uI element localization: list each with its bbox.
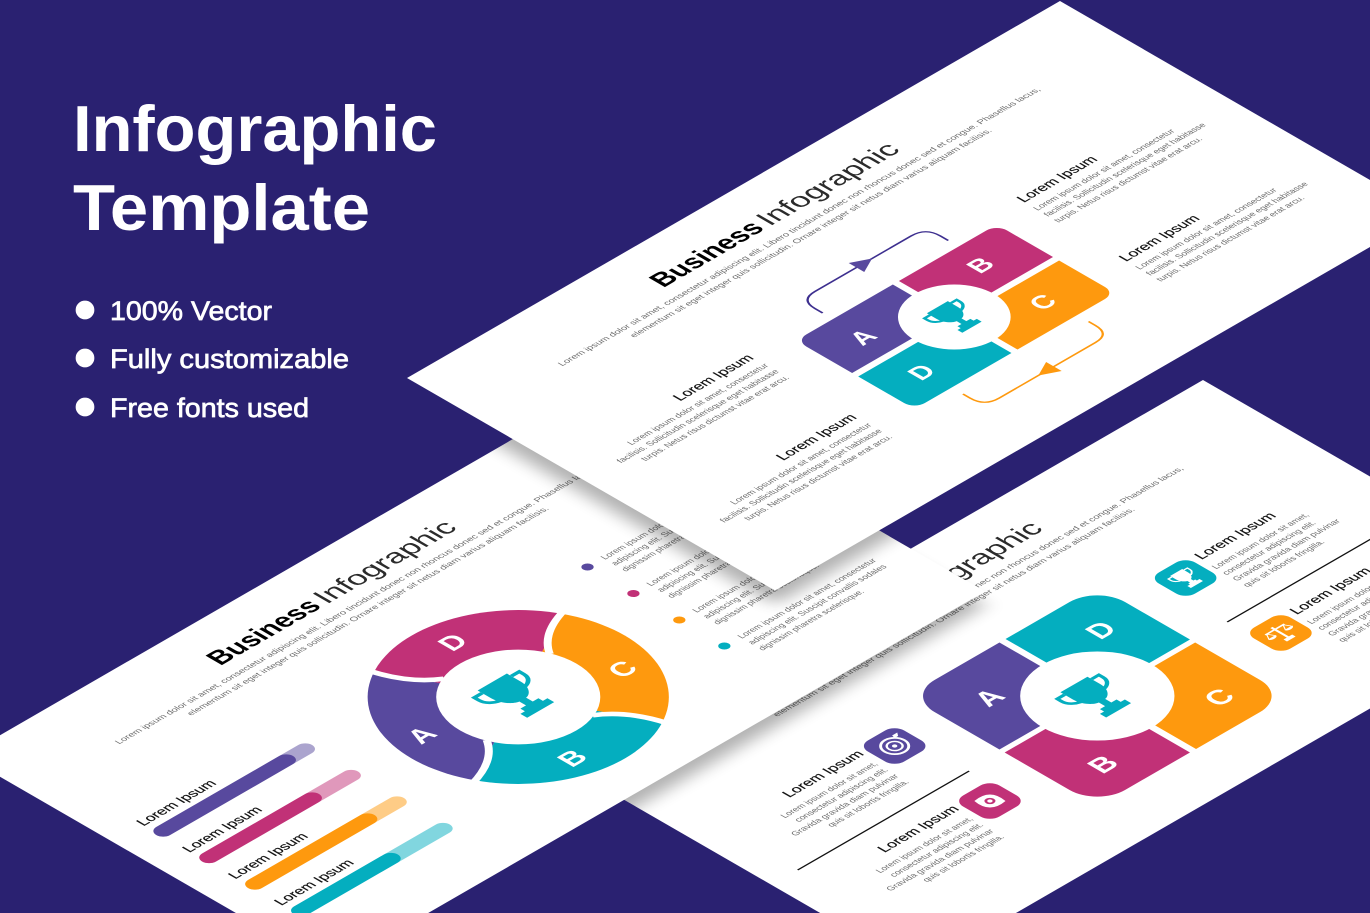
heading: slide title: Infographic [305,516,464,608]
text block: slide subtitle: Lorem ipsum dolor sit amet, consectetur adipiscing elit. Libero tincidunt donec non rhoncus donec sed et congue. Phasellus lacus, [112,464,600,745]
list: legend item orange: Lorem ipsum dolor sit amet, consectetur [690,531,834,614]
text block: left item two: quis sit lobortis fringilla. [920,833,1007,883]
chart: donut with four segments: D [431,629,475,655]
chart: four-part square diagram: B [1081,752,1127,778]
text block: right item two: Lorem Ipsum [1115,212,1203,263]
heading: slide title: Business [785,595,914,670]
chart: four-part square diagram: D [1079,617,1125,644]
icon: magenta eye badge [954,780,1026,822]
list: legend item purple: adipiscing elit. Suscipit convallis sodales [608,484,753,567]
list: legend item teal: dignissim pharetra scelerisque. [756,588,867,652]
bar: orange: Lorem Ipsum [224,830,312,881]
chart: four-part square diagram: C [1197,684,1243,711]
bar: teal [269,810,457,913]
chart: four-part cycle diagram: C [1022,290,1064,314]
text block: left item one: turpis. Netus risus dictumst vitae erat arcu. [638,374,792,462]
heading: slide title: Business [199,594,328,669]
list: legend item teal: Lorem ipsum dolor sit amet, consectetur [735,557,879,640]
list: legend item orange: dignissim pharetra scelerisque. [711,562,822,626]
text block: slide subtitle: Lorem ipsum dolor sit amet, consectetur adipiscing elit. Libero tincidunt donec non rhoncus donec sed et congue. Phasellus lacus, [555,86,1043,367]
text block: right item one: turpis. Netus risus dictumst vitae erat arcu. [1051,135,1205,224]
title: Template [73,171,370,244]
text block: left item one: Lorem Ipsum [669,352,757,403]
text block: left item two: Gravida gravida diam pulvinar [884,827,996,892]
text block: right item one: quis sit lobortis fringilla. [1240,538,1327,588]
bullet: 100% vector: 100% Vector [110,296,272,326]
title [73,92,437,244]
text block: right item two [1115,164,1321,283]
bar: magenta: Lorem Ipsum [178,804,266,854]
chart: donut with four segments: C [600,656,645,682]
text block: slide subtitle: elementum sit eget integer quis sollicitudin. Ornare integer sit netus diam varius aliquam facilisis. [627,127,994,339]
text block: right item one: Lorem ipsum dolor sit amet, consectetur [1031,127,1177,212]
text block: right item one [1013,105,1219,224]
text block: left item two: consectetur adipiscing elit. [887,821,986,878]
bar chart: progress bars [131,730,457,913]
list: feature bullets [76,296,349,423]
panel: slide with cycle diagram (top) [407,1,1370,590]
list: legend item magenta: Lorem ipsum dolor sit amet, consectetur [644,504,788,587]
text block: left item two [689,411,895,530]
chart: four-part cycle diagram: B [959,253,1001,277]
heading: slide title: Business [642,216,771,291]
list: legend item magenta: adipiscing elit. Suscipit convallis sodales [654,510,799,593]
heading: slide title: Infographic [748,138,907,230]
bar: orange [223,783,411,892]
icon: trophy [1053,672,1139,722]
chart: donut with four segments: A [400,722,444,748]
chart: four-part square diagram: A [967,685,1013,711]
title: Infographic [73,92,437,165]
text block: right item two: Lorem ipsum dolor sit amet, consectetur [1133,186,1279,271]
heading: slide title [785,517,1050,670]
text block: right item one: facilisis. Sollicitudin scelerisque eget habitasse [1041,121,1208,218]
text block: left item one: Lorem Ipsum [778,748,867,799]
panel: slide with square diagram and icons (bottom right) [550,380,1370,913]
text block: right item one: Lorem Ipsum [1190,510,1279,561]
list: legend item teal: adipiscing elit. Suscipit convallis sodales [745,563,890,646]
text block: right item one: Gravida gravida diam pulvinar [1230,517,1343,582]
text block: left item two: facilisis. Sollicitudin scelerisque eget habitasse [717,427,884,524]
panel: slide with donut chart and bars (bottom left) [0,379,985,913]
text block: right item two [1285,549,1370,643]
bar: magenta [177,757,365,866]
list: legend item orange [671,531,855,637]
text block: right item one [1189,494,1353,588]
chart: four-part cycle diagram: D [900,360,943,384]
icon: trophy [921,298,988,336]
text block: left item one: Lorem ipsum dolor sit amet, [778,760,880,819]
bar: purple: Lorem Ipsum [132,777,220,828]
list: legend item teal [716,557,900,663]
list: legend item purple [579,478,763,584]
text block: left item two: turpis. Netus risus dictumst vitae erat arcu. [741,433,895,522]
chart: four-part cycle diagram [796,224,1115,409]
arrow: purple loop [792,223,948,313]
text block: right item two: turpis. Netus risus dictumst vitae erat arcu. [1154,194,1307,283]
chart: donut with four segments: B [550,745,595,771]
text block: slide subtitle: Lorem ipsum dolor sit amet, consectetur adipiscing elit. Libero tincidunt donec non rhoncus donec sed et congue. Phasellus lacus, [698,465,1186,746]
text block: left item one: consectetur adipiscing elit. [792,766,891,823]
text block: left item one: Lorem ipsum dolor sit amet, consectetur [625,362,771,446]
text block: right item one: Lorem Ipsum [1013,153,1101,204]
text block: right item two: Lorem Ipsum [1285,565,1370,616]
list: legend item orange: adipiscing elit. Suscipit convallis sodales [700,537,845,620]
text block: left item one [748,748,913,843]
list: legend item purple: Lorem ipsum dolor sit amet, consectetur [598,478,742,561]
text block: left item two: Lorem ipsum dolor sit amet, consectetur [728,421,874,506]
chart: four-part cycle diagram: A [842,325,884,349]
text block: right item two: facilisis. Sollicitudin scelerisque eget habitasse [1143,180,1311,277]
icon: trophy [470,669,563,723]
text block: right item one: Lorem ipsum dolor sit amet, [1209,511,1311,570]
text block: left item two [843,803,1008,898]
bar: purple [131,730,319,839]
text block: left item two: Lorem Ipsum [772,411,860,462]
list: legend item purple: dignissim pharetra scelerisque. [619,509,730,573]
icon: orange scales badge [1245,612,1317,654]
list: legend item magenta [625,504,809,610]
bar: teal: Lorem Ipsum [270,857,357,907]
icon: purple target badge [858,725,931,767]
text block: left item one: facilisis. Sollicitudin scelerisque eget habitasse [614,368,781,464]
text block: left item one [586,351,792,470]
text block: left item one: quis sit lobortis fringilla. [825,778,911,828]
text block: left item two: Lorem Ipsum [873,803,962,854]
heading: slide title [642,138,907,291]
chart: four-part square diagram [907,586,1288,806]
list: legend item magenta: dignissim pharetra scelerisque. [665,535,776,599]
text block: slide subtitle: elementum sit eget integer quis sollicitudin. Ornare integer sit netus diam varius aliquam facilisis. [770,506,1137,718]
arrow: orange loop [963,322,1118,411]
heading: slide title: Infographic [891,517,1050,609]
heading: slide title [199,516,464,669]
chart: donut with four segments [305,574,731,820]
text block: left item two: Lorem ipsum dolor sit amet, [873,815,975,874]
text block: right item one: consectetur adipiscing elit. [1220,519,1318,576]
bullet: fully customizable: Fully customizable [110,344,349,374]
text block: slide subtitle: elementum sit eget integer quis sollicitudin. Ornare integer sit netus diam varius aliquam facilisis. [184,505,551,717]
bullet: free fonts used: Free fonts used [110,393,309,423]
text block: left item one: Gravida gravida diam pulvinar [788,772,901,837]
icon: teal trophy badge [1149,557,1222,599]
